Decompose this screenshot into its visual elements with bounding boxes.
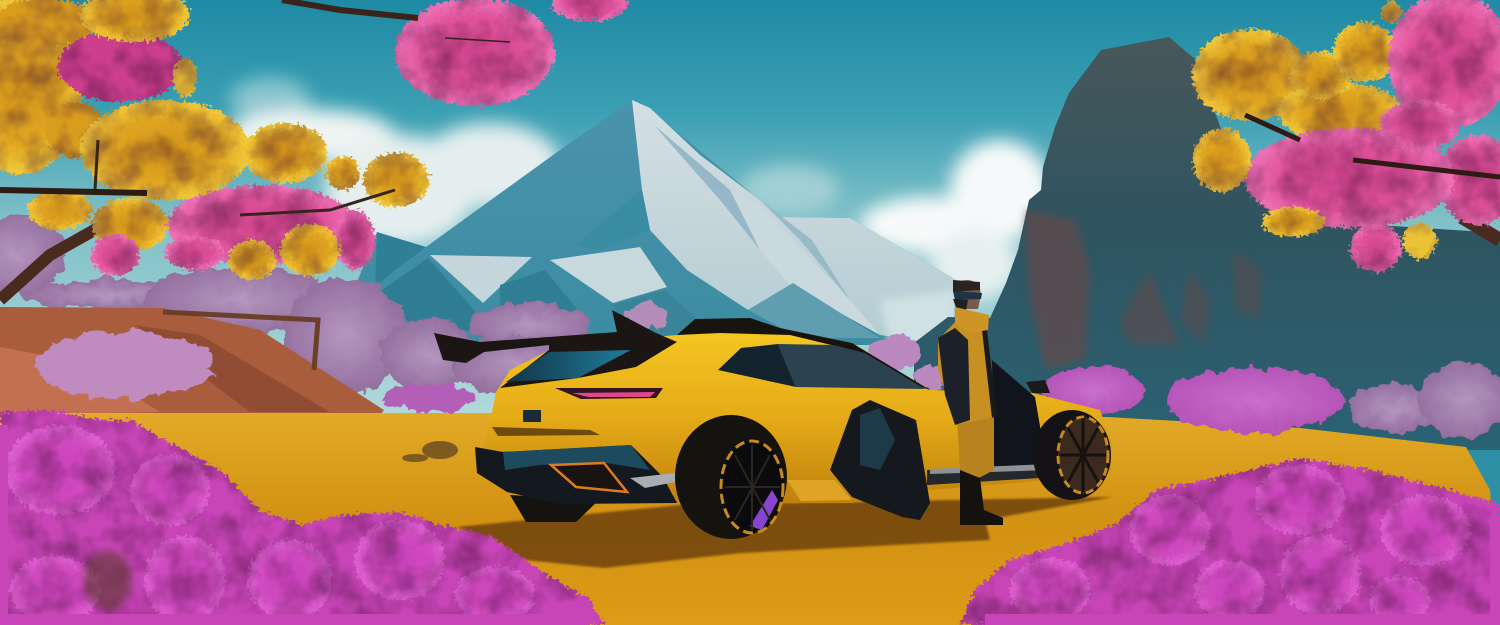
rear roof wing xyxy=(677,318,930,390)
top left fuzzy tree xyxy=(0,0,429,300)
purple bushes mid xyxy=(37,331,1345,432)
rear left wheel xyxy=(510,495,599,522)
boots xyxy=(960,470,1003,525)
car xyxy=(434,310,1111,539)
lilac tree line xyxy=(0,215,1500,438)
sky xyxy=(0,0,1500,440)
open cabin xyxy=(992,360,1047,468)
side sill xyxy=(927,466,1056,485)
lower yellow sill xyxy=(787,480,852,501)
top right fuzzy tree xyxy=(1192,0,1500,272)
small dry shrub xyxy=(402,441,458,462)
foreground magenta bush right xyxy=(960,458,1500,625)
rear badge and lower crease xyxy=(492,427,600,436)
top centre pink foliage xyxy=(282,0,628,106)
rear window xyxy=(506,350,631,382)
clouds xyxy=(225,78,1050,300)
legs xyxy=(957,417,994,480)
rear bumper xyxy=(475,445,677,504)
hillside with wooden frame xyxy=(0,307,384,415)
side mirror xyxy=(1026,380,1050,393)
tail light xyxy=(555,388,663,399)
open front door xyxy=(830,400,930,520)
side windows xyxy=(718,344,796,387)
jacket xyxy=(938,322,996,425)
dark plant in left bush xyxy=(84,550,132,610)
collar xyxy=(955,307,989,333)
rock cliff xyxy=(914,37,1500,450)
front wheel xyxy=(1033,410,1111,500)
mountain: snow peak xyxy=(350,100,956,345)
ground xyxy=(0,413,1500,625)
car shadow xyxy=(457,497,1113,568)
head xyxy=(953,280,981,309)
main wheel xyxy=(675,415,787,539)
foreground magenta bush left xyxy=(0,410,605,625)
person standing xyxy=(938,280,1003,525)
spoiler xyxy=(434,310,677,388)
main body xyxy=(477,328,1111,503)
